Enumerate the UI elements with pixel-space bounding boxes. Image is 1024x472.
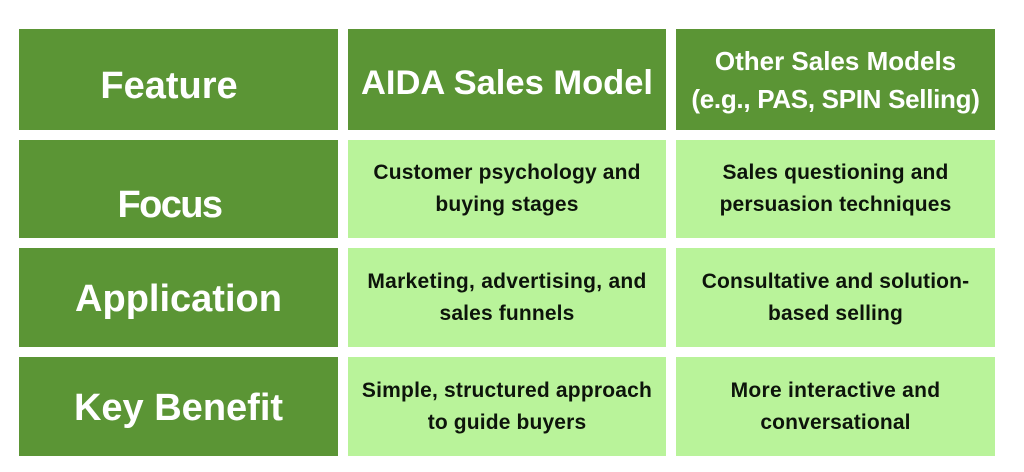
cell: other models focus: Sales questioning and: [722, 161, 949, 184]
cell: other models application: Consultative and solution-: [702, 270, 969, 293]
cell: AIDA focus: Customer psychology and: [373, 161, 641, 184]
row label: Application: [19, 248, 338, 347]
row label: Focus: Focus: [118, 184, 221, 226]
row label: Key Benefit: [19, 357, 338, 456]
cell: AIDA focus: buying stages: [435, 193, 579, 216]
cell: AIDA application: [348, 248, 666, 347]
cell: other models focus: persuasion techniques: [720, 193, 951, 216]
header cell: Other Sales Models: (e.g., PAS, SPIN Selling): [691, 84, 980, 114]
cell: AIDA key benefit: [348, 357, 666, 456]
row label: Key Benefit: Key Benefit: [74, 387, 283, 429]
cell: other models key benefit: [676, 357, 995, 456]
cell: AIDA application: Marketing, advertising, and: [367, 270, 647, 293]
cell: other models key benefit: conversational: [760, 411, 911, 434]
cell: other models application: based selling: [768, 302, 903, 325]
cell: AIDA application: sales funnels: [439, 302, 574, 325]
cell: AIDA key benefit: to guide buyers: [428, 411, 586, 434]
cell: AIDA key benefit: Simple, structured approach: [362, 379, 652, 402]
cell: other models focus: [676, 140, 995, 238]
header cell: Feature: [19, 29, 338, 130]
cell: other models application: [676, 248, 995, 347]
row label: Application: Application: [75, 278, 282, 320]
header cell: AIDA Sales Model: [348, 29, 666, 130]
header cell: AIDA Sales Model: AIDA Sales Model: [361, 64, 653, 102]
cell: other models key benefit: More interactive and: [731, 379, 940, 402]
row label: Focus: [19, 140, 338, 238]
header cell: Other Sales Models: [676, 29, 995, 130]
cell: AIDA focus: [348, 140, 666, 238]
header cell: Other Sales Models: Other Sales Models: [715, 46, 956, 76]
header cell: Feature: Feature: [100, 65, 238, 107]
